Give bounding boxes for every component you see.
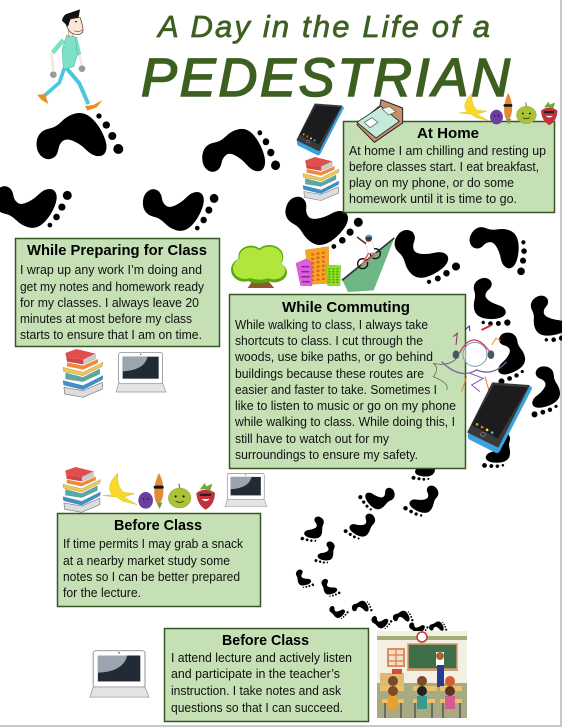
icon: laptop above Before Class	[225, 474, 267, 507]
body text	[20, 262, 204, 342]
icon: classroom scene	[377, 631, 467, 718]
panel: While Commuting	[230, 294, 466, 468]
footprint 4	[144, 190, 218, 230]
body text: homework until it is time to go.	[349, 191, 517, 206]
panel: At Home	[344, 122, 554, 212]
footprint 15	[358, 488, 396, 512]
icon: tree	[231, 245, 287, 288]
footprint 1	[38, 113, 123, 158]
footprint 19	[292, 569, 315, 592]
body text: before classes start. I eat breakfast,	[349, 159, 539, 174]
body text: and participate in the teacher’s	[171, 666, 340, 681]
footprint 20	[318, 578, 342, 601]
heading: While Commuting	[282, 299, 410, 316]
footprint 2	[203, 127, 282, 174]
footprint 17	[299, 515, 330, 548]
body text: At home I am chilling and resting up	[349, 143, 546, 158]
footprint 22	[352, 600, 373, 612]
icon: books below Preparing panel	[63, 349, 103, 397]
title line 1: A Day in the Life of a	[156, 9, 490, 44]
icon: laptop beside lecture panel	[90, 651, 149, 697]
icon: fruit characters above Before Class	[103, 473, 215, 510]
body text: surroundings to ensure my safety.	[235, 447, 418, 462]
icon: cyclist on bike path	[342, 235, 394, 292]
body text: get my notes and homework ready	[20, 279, 204, 294]
footprint 18	[313, 540, 340, 569]
panel: While Preparing for Class	[16, 238, 220, 346]
body text: minutes at most before my class	[20, 311, 192, 326]
footprint 6	[385, 227, 463, 294]
body text: easier and faster to take. Sometimes I	[235, 382, 437, 397]
footprint 16	[342, 512, 380, 544]
body text: for my classes. I always leave 20	[20, 295, 199, 310]
body text: while walking to class. While doing this, I	[234, 414, 455, 429]
body text: While walking to class, I always take	[235, 317, 428, 332]
footprint 23	[371, 616, 393, 630]
footprint 21	[328, 606, 349, 620]
body text: I attend lecture and actively listen	[171, 650, 352, 665]
icon: books above Before Class	[63, 467, 100, 512]
body text: shortcuts to class. I cut through the	[235, 333, 423, 348]
title	[141, 9, 511, 108]
footprints trail	[0, 113, 562, 636]
icon: fruit characters near At Home	[459, 93, 557, 125]
icon: large phone	[468, 383, 532, 453]
footprint 7	[467, 214, 540, 279]
footprint 10	[496, 333, 527, 386]
icon: person with headphones and music notes	[433, 325, 507, 392]
body text: instruction. I take notes and ask	[171, 683, 341, 698]
heading: At Home	[417, 125, 479, 142]
footprint 5	[280, 196, 365, 254]
body text: buildings because these routes are	[235, 366, 424, 381]
panel: Before Class (lecture)	[164, 628, 368, 722]
icon: city buildings	[296, 247, 341, 286]
body text: starts to ensure that I am on time.	[20, 327, 202, 342]
footprint 3	[0, 187, 72, 228]
icon: walking man	[37, 9, 103, 111]
footprint 24	[393, 610, 414, 622]
body text	[234, 317, 456, 462]
body text: for the lecture.	[63, 585, 141, 600]
footprint 13	[409, 450, 443, 487]
body text: questions so that I can succeed.	[171, 700, 343, 715]
body text: If time permits I may grab a snack	[63, 536, 243, 551]
footprint 11	[529, 366, 562, 421]
icon: laptop below Preparing panel	[116, 353, 166, 392]
title line 2: PEDESTRIAN	[141, 48, 511, 108]
body text	[349, 143, 546, 206]
footprint 14	[401, 484, 444, 523]
body text: play on my phone, or do some	[349, 175, 514, 190]
footprint 26	[429, 621, 448, 632]
body text	[171, 650, 352, 715]
icon: books near At Home	[303, 157, 339, 200]
body text: like to listen to music or go on my phone	[235, 398, 456, 413]
body text: woods, use bike paths, or go behind	[234, 349, 433, 364]
body text: notes so I can be better prepared	[63, 569, 240, 584]
body text	[63, 536, 243, 600]
icon: bed	[357, 100, 403, 142]
body text: at a nearby market study some	[63, 553, 230, 568]
footprint 9	[520, 293, 562, 353]
footprint 8	[462, 276, 514, 337]
panel: Before Class (snack)	[58, 514, 260, 606]
footprint 25	[408, 622, 429, 636]
body text: still have to watch out for my	[235, 431, 389, 446]
heading: Before Class	[222, 632, 309, 649]
heading: Before Class	[114, 517, 202, 534]
footprint 12	[480, 430, 519, 476]
heading: While Preparing for Class	[27, 242, 207, 259]
icon: phone near At Home	[297, 104, 344, 155]
body text: I wrap up any work I’m doing and	[20, 262, 202, 277]
